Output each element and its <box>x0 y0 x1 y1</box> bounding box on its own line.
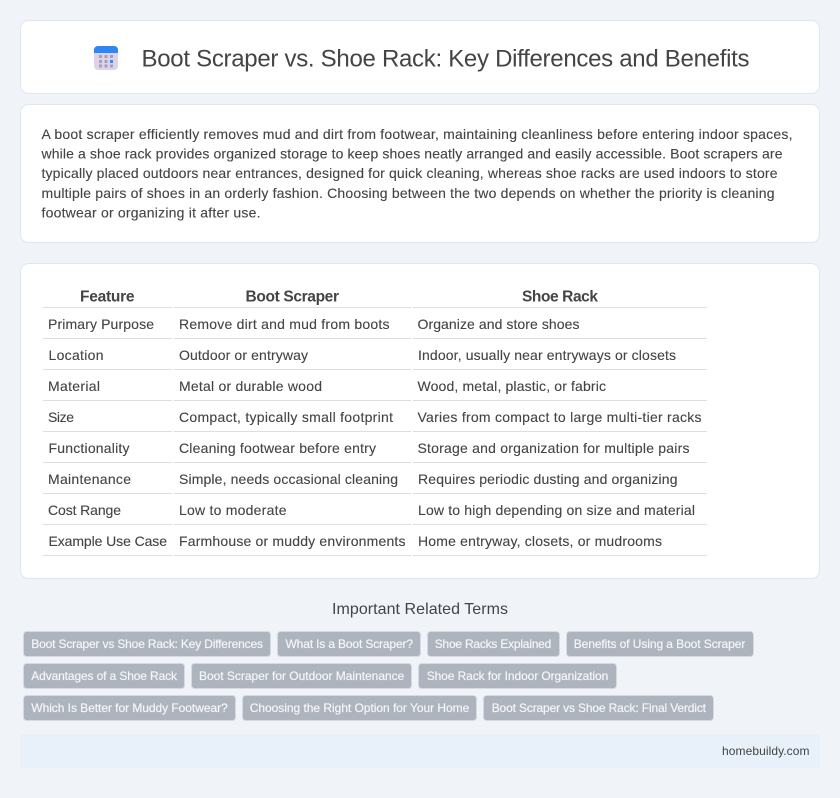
text block: description paragraph: A boot scraper efficiently removes mud and dirt from footwear, maintaining cleanliness before entering indoor spaces, <box>42 126 792 142</box>
table row: size: Size <box>48 409 74 425</box>
table row: maintenance: Requires periodic dusting and organizing <box>418 471 678 487</box>
panel: description <box>20 104 820 242</box>
tag <box>192 664 412 688</box>
tag <box>242 696 476 720</box>
table row: cost range: Low to high depending on size and material <box>418 502 695 518</box>
tag <box>484 696 714 720</box>
table row: cost range: Cost Range <box>48 502 121 518</box>
icon: calendar <box>94 46 118 70</box>
table row: primary purpose: Primary Purpose <box>48 316 154 332</box>
text block: description paragraph: typically placed outdoors near entrances, designed for quick cleaning, whereas shoe racks are used indoors to store <box>42 165 778 181</box>
tag: Boot Scraper vs Shoe Rack: Key Differences <box>31 637 263 651</box>
table row: maintenance: Maintenance <box>48 471 131 487</box>
table row: functionality: Functionality <box>48 440 130 456</box>
text block: description paragraph: multiple pairs of shoes in an orderly fashion. Choosing between the two depends on whether the priority is cleaning <box>42 185 774 201</box>
table row: example use case <box>48 533 662 549</box>
tag: Choosing the Right Option for Your Home <box>250 701 470 715</box>
table header row: Shoe Rack <box>522 288 598 306</box>
tag: Benefits of Using a Boot Scraper <box>574 637 745 651</box>
table row: primary purpose: Remove dirt and mud from boots <box>179 316 390 332</box>
text block: description paragraph: footwear or organizing it after use. <box>42 204 260 220</box>
tag: Shoe Racks Explained <box>435 637 551 651</box>
table row: cost range <box>48 502 695 518</box>
tag <box>24 632 270 656</box>
heading: important related terms: Important Related Terms <box>332 601 508 618</box>
tag <box>24 696 236 720</box>
table row: example use case: Home entryway, closets, or mudrooms <box>418 533 662 549</box>
table row: location: Outdoor or entryway <box>179 347 308 363</box>
table row: example use case: Example Use Case <box>48 533 167 549</box>
tag: Boot Scraper for Outdoor Maintenance <box>199 669 405 683</box>
table header row <box>80 288 598 306</box>
table row: size: Varies from compact to large multi-tier racks <box>418 409 702 425</box>
table row: functionality <box>48 440 690 456</box>
table row: location <box>48 347 676 363</box>
tag <box>428 632 560 656</box>
table row: maintenance: Simple, needs occasional cleaning <box>179 471 398 487</box>
table row: material: Wood, metal, plastic, or fabric <box>418 378 606 394</box>
footer domain: homebuildy.com <box>722 744 810 758</box>
tag: Boot Scraper vs Shoe Rack: Final Verdict <box>492 701 707 715</box>
tag <box>278 632 420 656</box>
tag <box>566 632 754 656</box>
panel: related term tags <box>24 632 754 720</box>
table row: functionality: Storage and organization for multiple pairs <box>418 440 690 456</box>
panel: title header <box>20 20 820 94</box>
tag <box>418 664 616 688</box>
table row: material <box>48 378 606 394</box>
tag: Which Is Better for Muddy Footwear? <box>31 701 228 715</box>
footer bar <box>20 734 820 768</box>
text block: description paragraph: while a shoe rack provides organized storage to keep shoes neatly arranged and easily accessible. Boot scrapers are <box>40 146 783 162</box>
table row: location: Indoor, usually near entryways or closets <box>418 347 676 363</box>
tag: Shoe Rack for Indoor Organization <box>427 669 608 683</box>
table row: material: Material <box>48 378 100 394</box>
table header row: Boot Scraper <box>246 288 339 306</box>
table row: material: Metal or durable wood <box>179 378 322 394</box>
title: Boot Scraper vs. Shoe Rack: Key Differences and Benefits <box>142 46 750 72</box>
table row: primary purpose <box>48 316 580 332</box>
tag: Advantages of a Shoe Rack <box>31 669 178 683</box>
table row: maintenance <box>48 471 678 487</box>
table row: location: Location <box>48 347 104 363</box>
table row: example use case: Farmhouse or muddy environments <box>179 533 406 549</box>
text block: description paragraph <box>40 126 792 220</box>
table row: cost range: Low to moderate <box>179 502 287 518</box>
table row: functionality: Cleaning footwear before entry <box>179 440 376 456</box>
table header row: Feature <box>80 288 135 306</box>
table row: size <box>48 409 702 425</box>
tag: What Is a Boot Scraper? <box>286 637 413 651</box>
tag <box>24 664 184 688</box>
table row: primary purpose: Organize and store shoes <box>418 316 580 332</box>
panel: comparison table <box>20 264 820 578</box>
table row: size: Compact, typically small footprint <box>179 409 393 425</box>
